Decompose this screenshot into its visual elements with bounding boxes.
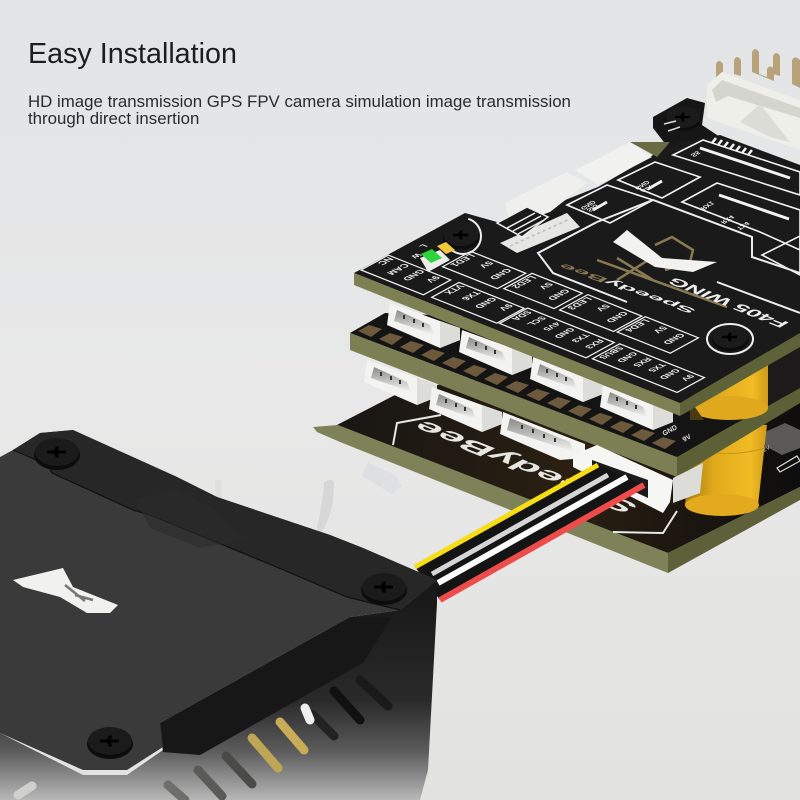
label: camera port: GND (400, 268, 427, 282)
rear small board with screw (653, 98, 720, 150)
rear silkscreen labels: GND (578, 199, 597, 210)
label: LED3 (560, 295, 642, 331)
label: LED4: GND (660, 332, 687, 346)
capacitor: lower (685, 420, 767, 516)
rear silkscreen labels: TX4 (734, 220, 751, 230)
rear silkscreen labels: GND (632, 179, 651, 190)
connector: lower 1 (364, 360, 437, 405)
module screw: right (361, 573, 407, 605)
voltage silkscreen: W (408, 252, 423, 259)
label: LED2: LED2 (509, 275, 539, 289)
component on bottom board: 2V (762, 445, 771, 454)
connector: lower 3 wide (500, 412, 585, 460)
rear white connector with pins (707, 49, 800, 150)
label: LED1 (443, 251, 526, 289)
rear silkscreen bars (593, 148, 790, 219)
upper connectors row (387, 303, 673, 430)
comb of connector pins (712, 138, 752, 155)
label: I2C GPS port: TX3 (569, 332, 592, 344)
bottom circuit board (313, 300, 800, 573)
label: LED2: 5V (536, 281, 555, 290)
label: LED4: LED4 (623, 318, 652, 333)
module top rear strip (13, 430, 437, 610)
rear silkscreen boxes (567, 140, 800, 275)
top circuit board (354, 135, 800, 416)
description text: through direct insertion (28, 109, 199, 128)
flight module enclosure (0, 430, 437, 800)
label: I2C GPS port: GND (552, 327, 578, 339)
wire: grey (432, 475, 608, 574)
module seam lines (13, 450, 400, 610)
product name: F405 WING (664, 275, 793, 329)
wire: white (438, 477, 627, 583)
module vents (18, 680, 388, 800)
pad label 9V: 9V (682, 433, 693, 444)
rear silkscreen labels: RX1 (698, 200, 716, 210)
logo outline lines (538, 200, 800, 313)
JST plug (573, 445, 703, 513)
worn silver label (13, 568, 118, 613)
label: LED2: GND (545, 288, 572, 302)
solder pads (358, 325, 676, 449)
label: receiver port: SBUS (596, 345, 626, 360)
label: receiver port: GND (657, 368, 683, 380)
pad label GND: GND (662, 424, 679, 438)
brand text: SpeedyBee (556, 262, 700, 315)
label: camera port: 9V (423, 275, 442, 284)
wire: yellow (415, 465, 598, 567)
rear silkscreen labels: S5 (688, 150, 702, 157)
speedybee logo (613, 230, 717, 272)
label: LED3: 5V (594, 303, 612, 312)
label: LED1: 5V (477, 260, 496, 269)
middle circuit board (350, 313, 800, 477)
label: LED4: 5V (651, 325, 670, 334)
label: LED3: GND (603, 310, 630, 324)
label: camera port: CAM (384, 262, 412, 276)
label: I2C GPS port: 4V5 (540, 321, 563, 332)
connector: lower 2 (429, 387, 502, 432)
connector: upper 4 (600, 385, 673, 430)
label: LED1: LED1 (448, 253, 477, 268)
connector: upper 3 (530, 357, 603, 402)
rear silkscreen labels: SIG (584, 203, 600, 212)
module screw: bottom (87, 727, 133, 759)
background smudges (215, 462, 402, 532)
lower connectors row (364, 360, 585, 460)
silkscreen brand on bottom board: SpeedyBee (406, 417, 645, 516)
label: VTX port: TX6 (459, 290, 483, 301)
module top face (0, 430, 437, 770)
label: LED3: LED3 (565, 296, 594, 311)
module side face (0, 580, 437, 800)
label: VTX port: VTX (442, 283, 467, 295)
module recess (160, 617, 392, 755)
label: receiver port: RX5 (630, 356, 654, 368)
rear white plugs (500, 142, 652, 253)
rear silkscreen labels: AIR (638, 184, 654, 193)
description text: HD image transmission GPS FPV camera simulation image transmission (28, 92, 571, 111)
title: Easy Installation (28, 38, 237, 70)
label: I2C GPS port: SDA (509, 310, 534, 322)
worn label shading (65, 585, 93, 601)
board screws (443, 218, 753, 354)
connector: upper 2 (459, 330, 532, 375)
gold logo marks (597, 237, 727, 307)
connector: upper 1 (387, 303, 460, 348)
capacitor: upper (690, 350, 768, 420)
wire: red (440, 485, 644, 600)
rear silkscreen labels: RX4 (718, 214, 736, 224)
module screw: top left (34, 438, 80, 470)
wire harness (415, 465, 644, 600)
component on bottom board (762, 423, 800, 472)
label: LED4 (617, 317, 698, 353)
bottom board outline marks (393, 415, 677, 533)
under-board dark area (768, 333, 800, 406)
LEDs (420, 242, 455, 272)
LED silkscreen: L (417, 243, 429, 249)
label: VTX port: 9V (496, 303, 515, 312)
label: I2C GPS port: SCL (525, 315, 549, 327)
label: LED2 (504, 273, 582, 309)
module scuffs (135, 488, 245, 548)
description text (28, 92, 571, 128)
rear silkscreen labels (578, 150, 751, 230)
label: LED1: GND (487, 267, 514, 281)
silkscreen label boxes (361, 232, 744, 394)
label: camera port (361, 255, 451, 295)
battery icon pads (497, 207, 548, 237)
label: receiver port: TX5 (645, 362, 669, 373)
label: camera port: NC (375, 256, 396, 266)
label: receiver port: GND (614, 351, 640, 364)
label: receiver port (592, 344, 704, 392)
label: I2C GPS port: RX3 (582, 338, 606, 350)
label: VTX port: GND (472, 296, 499, 310)
label: VTX port (432, 282, 524, 323)
label: receiver port: 9V (678, 373, 697, 382)
label: I2C GPS port (500, 308, 614, 358)
